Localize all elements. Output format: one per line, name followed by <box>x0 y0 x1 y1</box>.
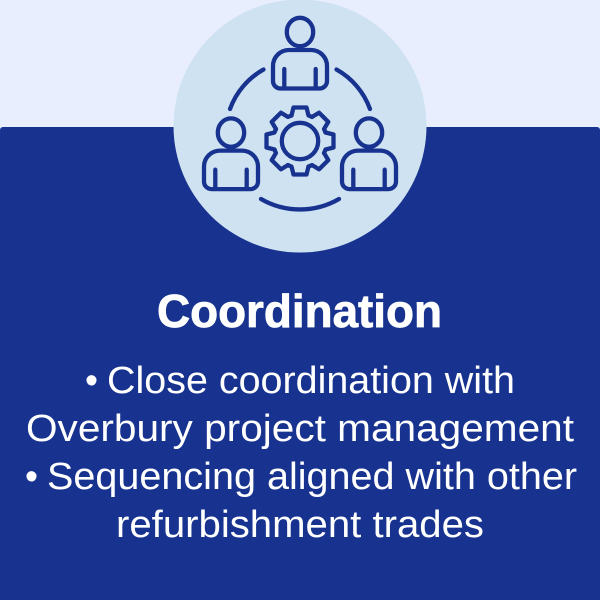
body text <box>25 360 577 546</box>
navy panel <box>0 127 600 600</box>
icon circle <box>174 0 426 252</box>
icon: right person <box>342 118 396 189</box>
bullet line 2 continuation: refurbishment trades <box>116 504 484 546</box>
bullet line 1: Close coordination with <box>107 360 515 402</box>
bullet line 1: • <box>85 360 98 402</box>
icon: top person <box>273 18 327 88</box>
bullet line 2: • <box>25 456 38 498</box>
icon: gear <box>266 108 334 174</box>
icon: bottom arc <box>261 199 339 209</box>
heading: Coordination <box>157 285 442 337</box>
icon: right arc <box>336 70 370 109</box>
icon: team coordination <box>204 18 396 209</box>
icon: left person <box>204 118 258 189</box>
icon: left arc <box>230 70 264 109</box>
bullet line 1 continuation: Overbury project management <box>26 408 574 450</box>
bullet line 2: Sequencing aligned with other <box>47 456 577 498</box>
